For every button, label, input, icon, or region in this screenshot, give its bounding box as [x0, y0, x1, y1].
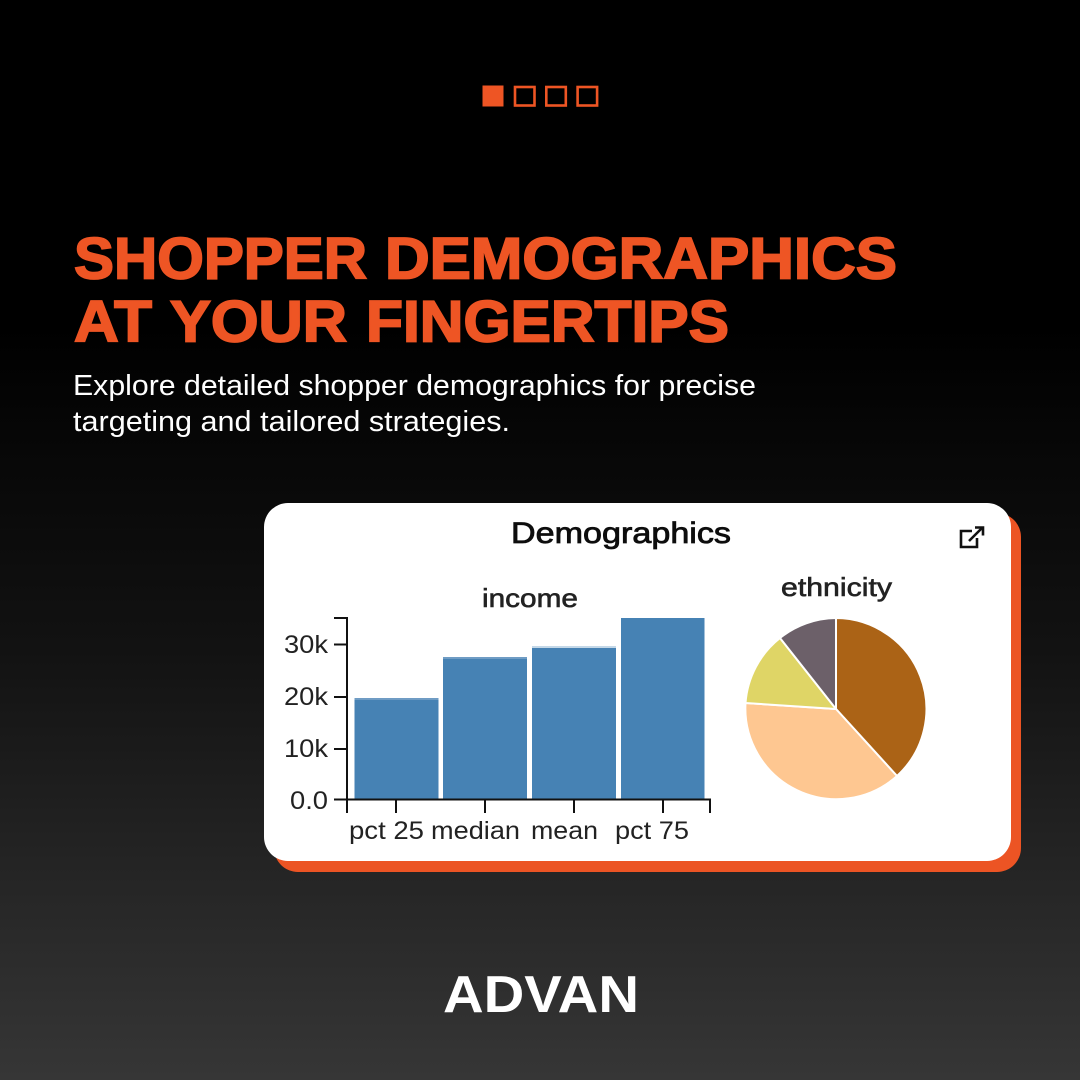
title: YOUR	[170, 290, 347, 354]
card orange offset shadow	[274, 513, 1021, 872]
card heading: Demographics	[511, 517, 731, 550]
pie chart: ethnicity	[745, 572, 926, 799]
x axis labels: pct 25	[349, 817, 424, 845]
x axis labels	[349, 817, 689, 845]
bar chart: income	[284, 583, 710, 845]
pagination squares	[482, 86, 597, 106]
y axis labels: 10k	[284, 735, 329, 763]
y axis labels: 0.0	[290, 787, 328, 815]
subtitle	[73, 370, 756, 438]
bar top highlights	[354, 646, 616, 700]
bars	[354, 618, 704, 800]
card white surface	[264, 503, 1011, 861]
income chart title: income	[482, 583, 578, 613]
panel: demographics card	[264, 503, 1021, 872]
logo: ADVAN: ADVAN	[443, 966, 639, 1024]
y axis labels	[284, 631, 329, 815]
title: DEMOGRAPHICS	[385, 226, 897, 292]
y axis labels: 30k	[284, 631, 329, 659]
x axis labels: mean	[531, 817, 598, 845]
axes and ticks	[334, 618, 710, 813]
title: SHOPPER	[74, 226, 367, 292]
y axis labels: 20k	[284, 683, 329, 711]
icon: open external link	[961, 528, 983, 547]
x axis labels: pct 75	[615, 817, 689, 845]
title: AT	[74, 290, 152, 354]
x axis labels: median	[431, 817, 520, 845]
subtitle: Explore detailed shopper demographics for precise	[73, 370, 756, 402]
title	[74, 226, 897, 354]
subtitle: targeting and tailored strategies.	[73, 406, 510, 438]
title: FINGERTIPS	[366, 290, 729, 354]
slices	[745, 618, 926, 799]
ethnicity chart title: ethnicity	[781, 572, 892, 602]
